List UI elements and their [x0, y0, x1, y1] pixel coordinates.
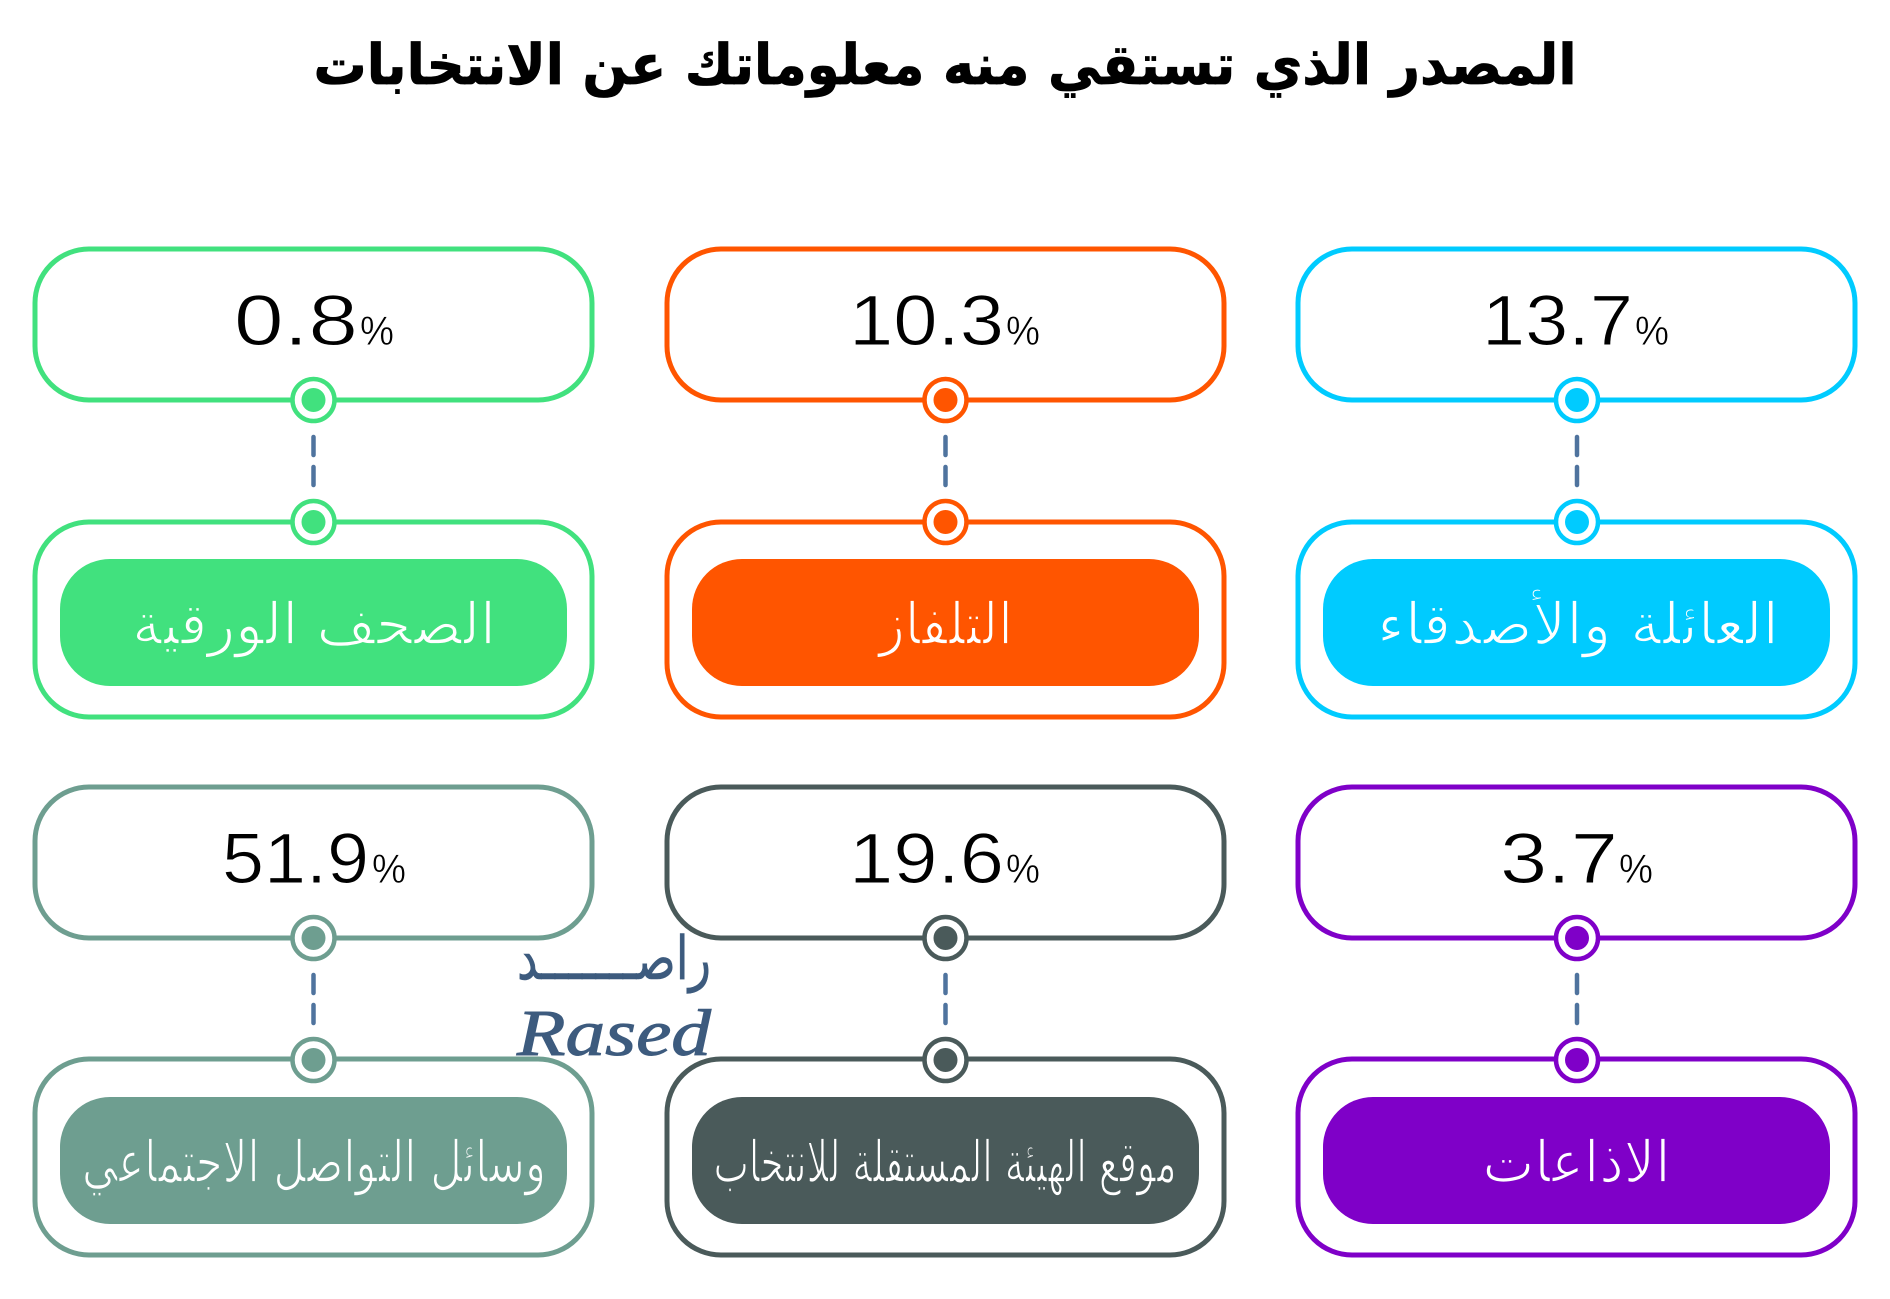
label card: [35, 522, 592, 717]
label card: [667, 522, 1224, 717]
label pill: [1323, 559, 1830, 686]
value card: [35, 249, 592, 400]
connector: [292, 379, 334, 543]
value card: [35, 787, 592, 938]
logo Latin wordmark: Rased: [516, 997, 712, 1070]
percent sign: %: [372, 846, 406, 892]
logo Arabic wordmark: راصـــــــد: [517, 924, 711, 994]
percent sign: %: [1619, 846, 1653, 892]
label: وسائل التواصل الاجتماعي: [82, 1128, 546, 1197]
value card: [1298, 249, 1855, 400]
label card: [35, 1059, 592, 1255]
percent sign: %: [360, 308, 394, 354]
panel: radio: [1298, 787, 1855, 1255]
label card: [1298, 522, 1855, 717]
panel: family and friends: [1298, 249, 1855, 717]
connector: [292, 917, 334, 1081]
value: 10.3: [849, 282, 1004, 361]
value: 13.7: [1482, 282, 1633, 361]
value: 0.8: [234, 282, 358, 361]
label pill: [60, 559, 567, 686]
logo: Rased: [516, 924, 712, 1070]
panel: election commission website: [667, 787, 1224, 1255]
panel: television: [667, 249, 1224, 717]
connector: [924, 917, 966, 1081]
value: 19.6: [849, 820, 1004, 899]
label: العائلة والأصدقاء: [1377, 588, 1779, 659]
connector: [1556, 917, 1598, 1081]
connector: [1556, 379, 1598, 543]
value: 51.9: [222, 820, 369, 899]
label: الصحف الورقية: [132, 590, 496, 659]
percent sign: %: [1635, 308, 1669, 354]
value card: [1298, 787, 1855, 938]
label pill: [60, 1097, 567, 1224]
label pill: [1323, 1097, 1830, 1224]
label pill: [692, 1097, 1199, 1224]
value card: [667, 249, 1224, 400]
label card: [1298, 1059, 1855, 1255]
panel: social media: [35, 787, 592, 1255]
value: 3.7: [1500, 820, 1618, 899]
value card: [667, 787, 1224, 938]
label: التلفاز: [876, 590, 1013, 658]
connector: [924, 379, 966, 543]
percent sign: %: [1006, 308, 1040, 354]
title: المصدر الذي تستقي منه معلوماتك عن الانتخابات: [314, 33, 1576, 98]
label card: [667, 1059, 1224, 1255]
panel: newspapers: [35, 249, 592, 717]
label pill: [692, 559, 1199, 686]
percent sign: %: [1006, 846, 1040, 892]
label: الاذاعات: [1482, 1128, 1670, 1196]
label: موقع الهيئة المستقلة للانتخاب: [714, 1128, 1176, 1197]
